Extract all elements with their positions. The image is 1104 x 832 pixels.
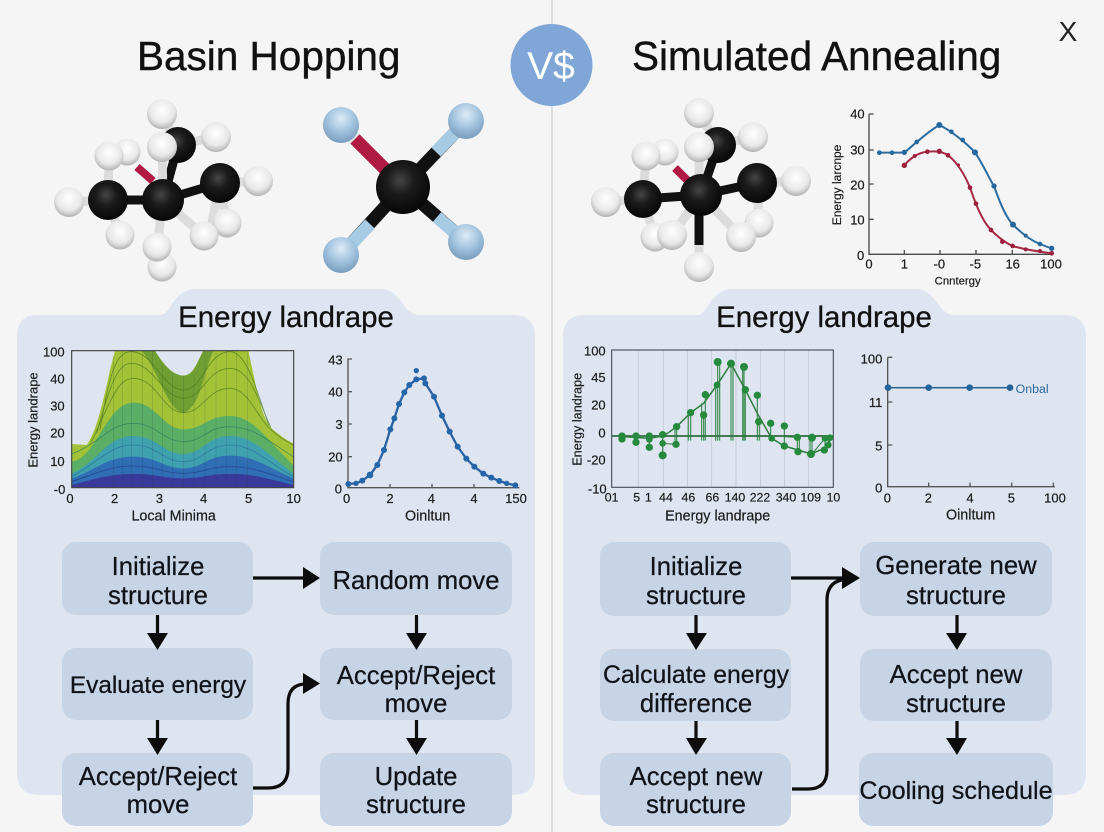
line chart: energy vs category, top right: -5 <box>970 257 981 272</box>
VS badge: V$ <box>527 45 575 88</box>
flow box: Calculate energy difference <box>600 649 791 721</box>
contour chart: local minima: -0 <box>54 482 65 497</box>
arrow: calculate to accept <box>686 721 707 755</box>
panel heading: Energy landrape <box>716 301 932 334</box>
contour chart: local minima <box>25 345 301 524</box>
flow box: Accept/Reject move lower <box>62 753 253 826</box>
flow box: Accept/Reject move lower: move <box>127 791 189 819</box>
stem chart: energy landscape: 46 <box>681 491 695 505</box>
stem chart: energy landscape: 66 <box>705 491 719 505</box>
stem chart: energy landscape: -20 <box>587 453 606 468</box>
close mark X: X <box>1059 16 1078 47</box>
flow box: Accept new structure lower: structure <box>646 791 746 819</box>
line chart: flat orbital series <box>861 351 1066 524</box>
arrow: initialize to evaluate <box>147 615 168 650</box>
flow box: Random move <box>320 542 512 615</box>
line chart: peak curve: 4 <box>428 491 435 506</box>
flow box: Update structure: Update <box>375 763 457 791</box>
title: Basin Hopping: Basin Hopping <box>137 33 400 79</box>
flow box: Accept new structure lower: Accept new <box>630 763 763 791</box>
flow box: Generate new structure <box>860 542 1052 616</box>
stem chart: energy landscape: 45 <box>591 370 606 385</box>
arrow: evaluate to accept <box>147 720 168 755</box>
arrow: initialize to generate <box>791 567 860 589</box>
contour chart: local minima: 4 <box>200 491 207 506</box>
stem chart: energy landscape: -10 <box>588 481 607 496</box>
line chart: energy vs category, top right <box>830 107 1062 288</box>
flow box: Cooling schedule <box>859 753 1053 826</box>
flow box: Accept new structure <box>860 649 1052 721</box>
stem chart: energy landscape: 10 <box>826 491 840 505</box>
contour chart: local minima: Local Minima <box>131 508 216 524</box>
arrow: initialize to calculate <box>686 615 707 650</box>
flow box: Accept/Reject move: move <box>385 690 447 718</box>
VS badge <box>510 24 592 106</box>
flow box: Initialize structure <box>62 542 253 615</box>
stem chart: energy landscape: 0 <box>598 426 606 441</box>
line chart: peak curve <box>328 352 527 525</box>
line chart: energy vs category, top right: Cnntergy <box>935 276 981 288</box>
stem chart: energy landscape: 109 <box>800 491 821 505</box>
line chart: peak curve: 150 <box>505 491 527 506</box>
icon: molecule right, carbon and hydrogen <box>591 98 811 282</box>
arrow: accept to update <box>406 720 427 755</box>
line chart: peak curve: 43 <box>328 352 343 367</box>
stem chart: energy landscape: Energy landrape <box>665 508 770 524</box>
line chart: energy vs category, top right: 40 <box>850 107 865 122</box>
contour chart: local minima: 3 <box>156 491 163 506</box>
arrow: lower accept loop to upper accept <box>253 673 320 788</box>
flow box: Update structure: structure <box>366 791 466 819</box>
contour chart: local minima: 100 <box>43 345 65 360</box>
stem chart: energy landscape: 222 <box>750 491 770 505</box>
title: Simulated Annealing: Simulated Annealing <box>632 33 1001 79</box>
line chart: energy vs category, top right: 100 <box>1040 257 1062 272</box>
arrow: lower accept loop to generate <box>792 579 848 789</box>
line chart: peak curve: 4 <box>470 491 478 506</box>
flow box: Calculate energy difference: difference <box>640 690 752 718</box>
line chart: flat orbital series: Oinltum <box>946 508 995 524</box>
flow box: Accept new structure lower <box>600 753 791 826</box>
line chart: peak curve: Oinltun <box>405 509 450 525</box>
line chart: energy vs category, top right: 0 <box>865 257 873 272</box>
contour chart: local minima: 40 <box>50 372 65 387</box>
flow box: Accept/Reject move: Accept/Reject <box>337 662 495 690</box>
contour chart: local minima: 10 <box>50 454 65 469</box>
arrow: generate to accept <box>946 615 967 650</box>
contour chart: local minima: Energy landrape <box>25 372 40 468</box>
line chart: flat orbital series: 100 <box>861 351 882 366</box>
line chart: energy vs category, top right: 0 <box>857 248 864 263</box>
line chart: flat orbital series: 0 <box>884 490 891 505</box>
flow box: Initialize structure: Initialize <box>650 553 742 581</box>
line chart: energy vs category, top right: 30 <box>850 143 865 158</box>
stem chart: energy landscape: 340 <box>776 491 796 505</box>
flow box: Initialize structure: structure <box>108 582 208 610</box>
contour chart: local minima: 0 <box>66 491 74 506</box>
line chart: flat orbital series: Onbal <box>1016 382 1049 396</box>
icon: molecule left, carbon and hydrogen <box>54 99 273 282</box>
flow box: Cooling schedule: Cooling schedule <box>859 777 1053 805</box>
stem chart: energy landscape: 100 <box>584 343 606 358</box>
stem chart: energy landscape: 20 <box>591 397 606 412</box>
flow box: Evaluate energy <box>62 648 253 720</box>
flow box: Generate new structure: structure <box>906 582 1006 610</box>
line chart: flat orbital series: 100 <box>1044 490 1066 505</box>
line chart: flat orbital series: 11 <box>869 395 882 410</box>
line chart: flat orbital series: 4 <box>966 490 974 505</box>
line chart: peak curve: 0 <box>335 481 342 496</box>
flow box: Initialize structure: structure <box>646 582 746 610</box>
contour chart: local minima: 2 <box>111 491 118 506</box>
flow box: Accept/Reject move lower: Accept/Reject <box>79 763 237 791</box>
stem chart: energy landscape: 44 <box>659 491 673 505</box>
stem chart: energy landscape: Energy landrape <box>570 373 584 466</box>
stem chart: energy landscape: 140 <box>725 491 745 505</box>
contour chart: local minima: 5 <box>245 491 252 506</box>
flow box: Initialize structure: Initialize <box>112 553 204 581</box>
arrow: initialize to random move <box>253 567 320 589</box>
line chart: flat orbital series: 5 <box>1008 490 1015 505</box>
line chart: peak curve: 40 <box>328 384 343 399</box>
line chart: peak curve: 0 <box>343 491 350 506</box>
line chart: energy vs category, top right: 16 <box>1005 257 1020 272</box>
icon: molecule center, blue atoms <box>323 103 484 273</box>
flow box: Initialize structure <box>600 542 791 616</box>
arrow: random move to accept <box>406 615 427 650</box>
flow box: Random move: Random move <box>332 567 500 595</box>
stem chart: energy landscape: 1 <box>645 491 652 505</box>
arrow: accept to cooling <box>946 721 967 755</box>
flow box: Update structure <box>320 753 512 826</box>
contour chart: local minima: 20 <box>50 426 65 441</box>
line chart: flat orbital series: 5 <box>875 438 882 453</box>
line chart: energy vs category, top right: -0 <box>934 257 945 272</box>
line chart: energy vs category, top right: 1 <box>901 257 908 272</box>
flow box: Accept/Reject move <box>320 648 512 720</box>
flow box: Accept new structure: structure <box>906 690 1006 718</box>
line chart: energy vs category, top right: 10 <box>850 212 865 227</box>
line chart: energy vs category, top right: 20 <box>850 177 865 192</box>
panel: Basin Hopping energy landscape <box>17 289 535 826</box>
flow box: Evaluate energy: Evaluate energy <box>70 672 247 699</box>
panel: Simulated Annealing energy landscape <box>563 289 1086 826</box>
line chart: flat orbital series: 0 <box>875 481 882 496</box>
stem chart: energy landscape: 5 <box>633 491 640 505</box>
line chart: peak curve: 3 <box>335 417 343 432</box>
flow box: Accept new structure: Accept new <box>890 661 1023 689</box>
stem chart: energy landscape <box>570 343 840 524</box>
line chart: peak curve: 20 <box>328 449 343 464</box>
stem chart: energy landscape: 01 <box>605 491 619 505</box>
contour chart: local minima: 30 <box>50 399 65 414</box>
contour chart: local minima: 10 <box>286 491 301 506</box>
flow box: Calculate energy difference: Calculate energy <box>603 662 790 689</box>
line chart: flat orbital series: 2 <box>925 490 932 505</box>
line chart: energy vs category, top right: Energy larcnpe <box>830 144 844 225</box>
panel heading: Energy landrape <box>178 301 394 334</box>
flow box: Generate new structure: Generate new <box>875 552 1037 580</box>
line chart: peak curve: 2 <box>386 491 394 506</box>
